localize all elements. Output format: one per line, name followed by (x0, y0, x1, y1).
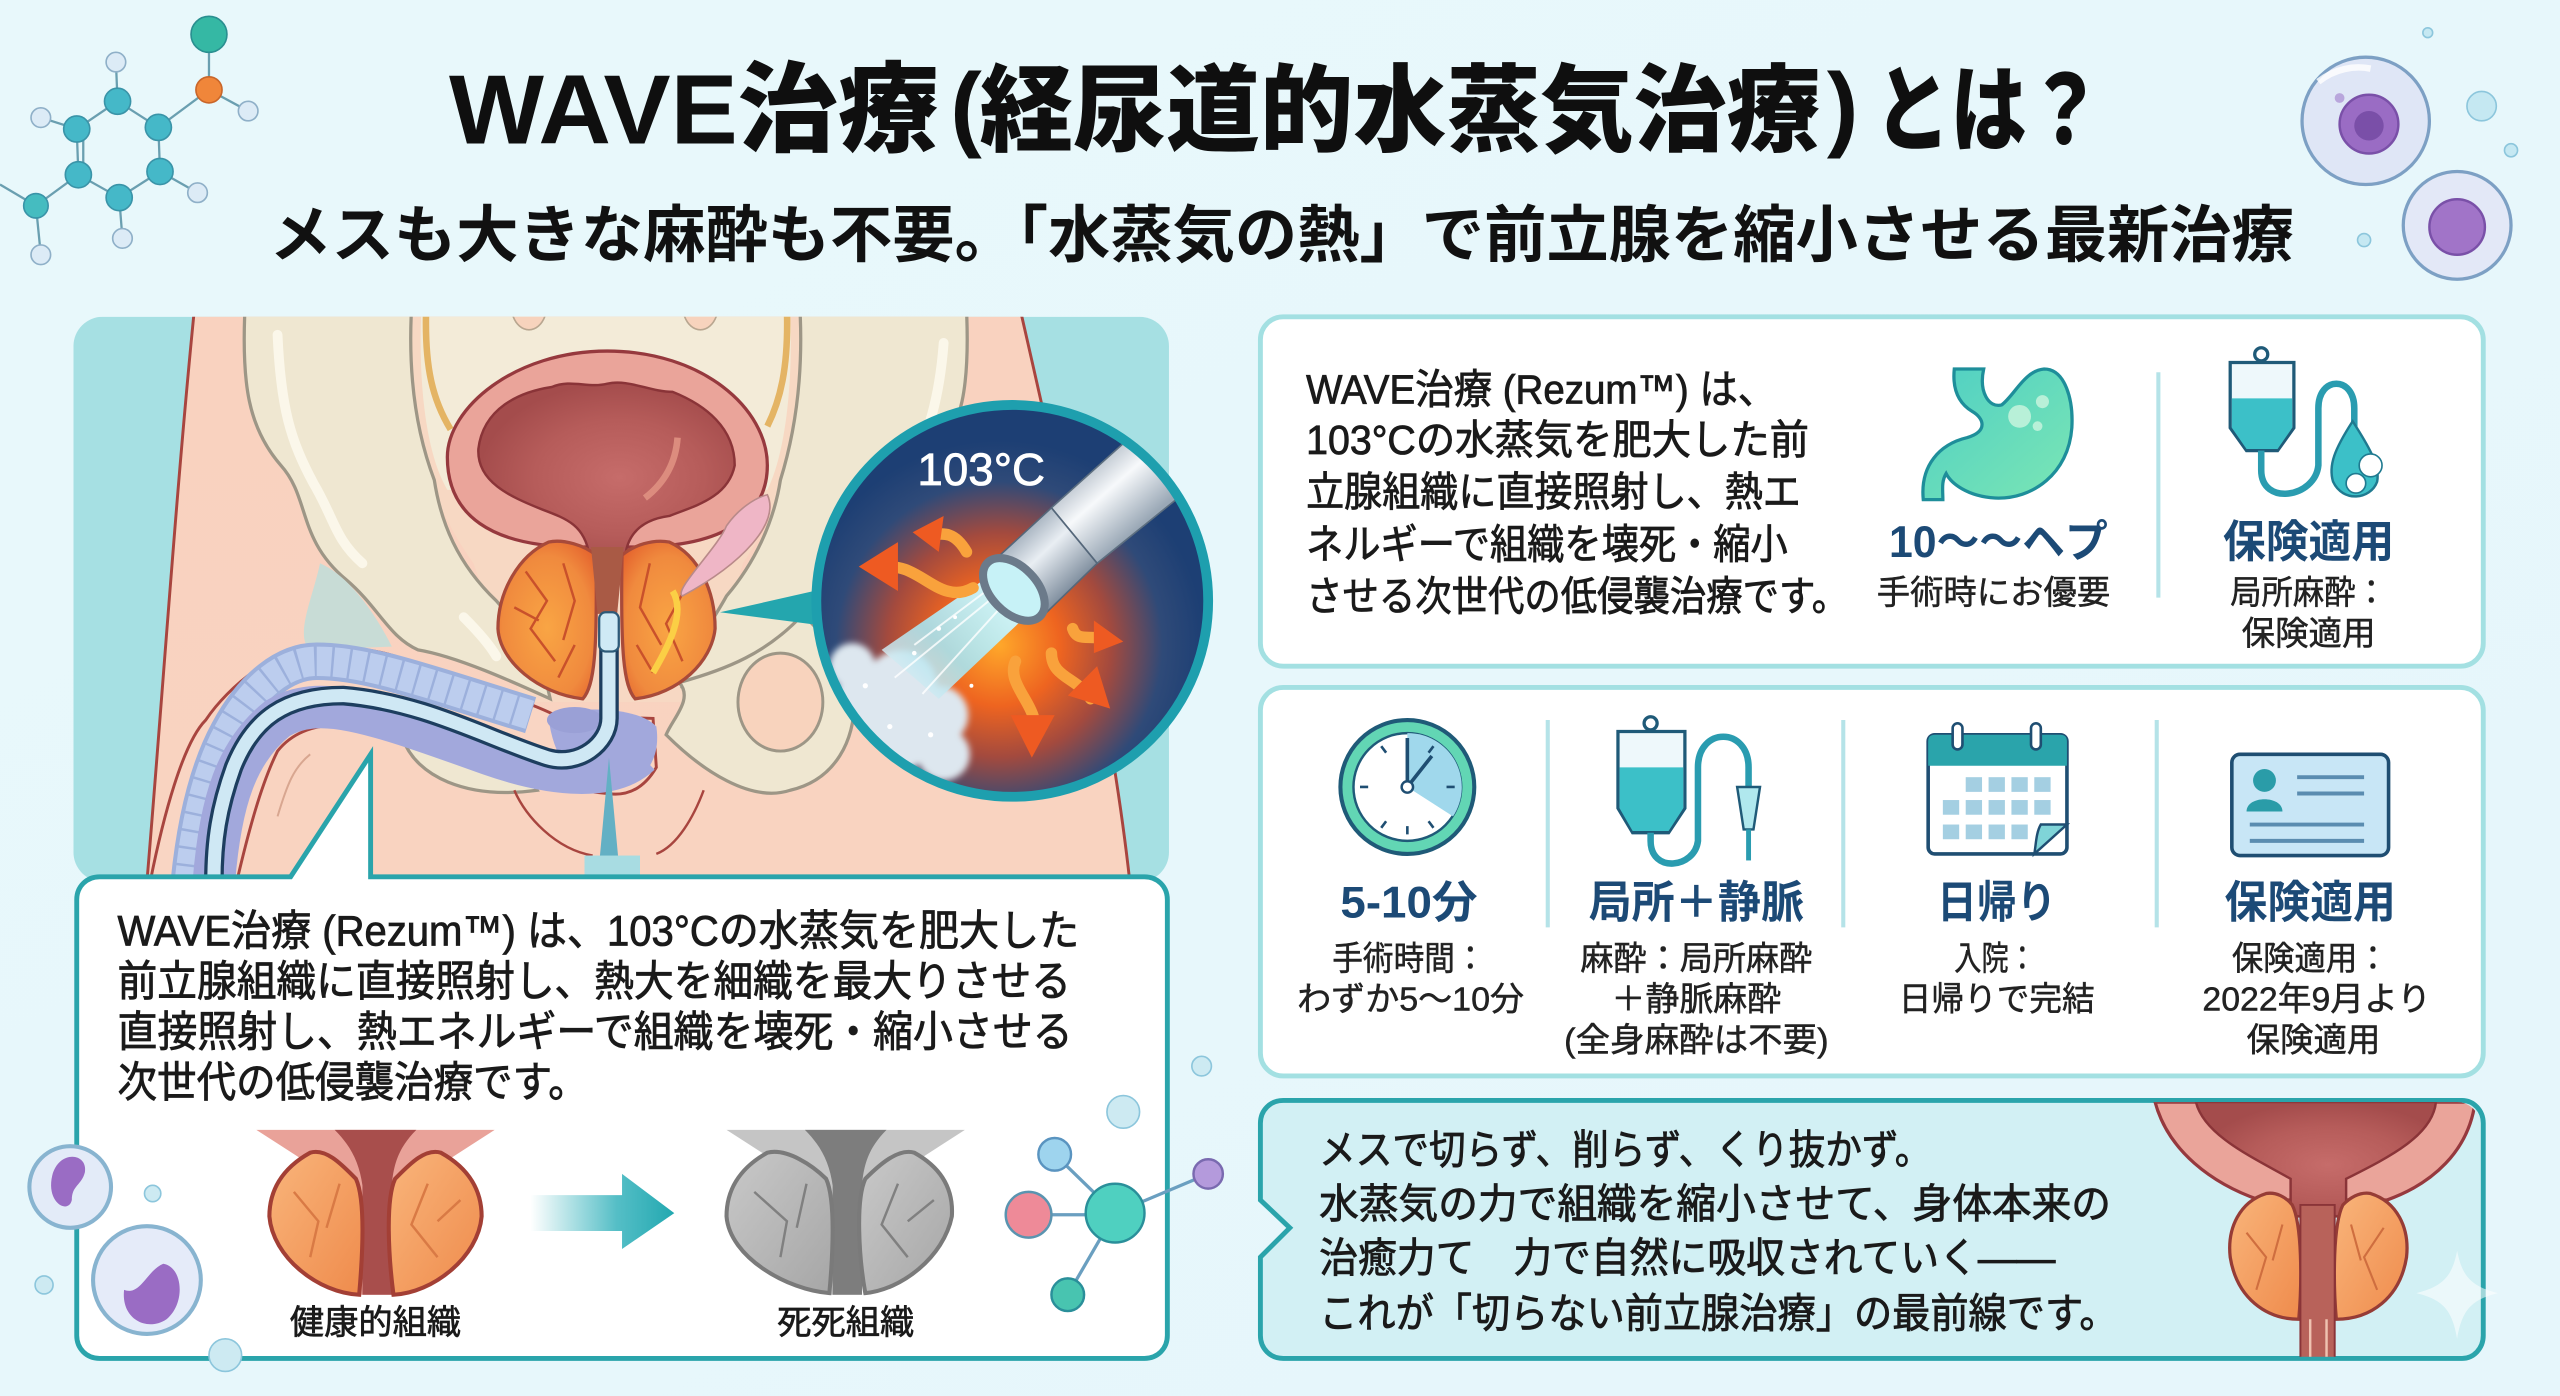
icon: insurance card (2232, 754, 2389, 856)
transition arrow (531, 1174, 674, 1249)
panel: conclusion card (1260, 1100, 2498, 1358)
orange arrows (898, 528, 1094, 716)
sublabel (2230, 575, 2387, 653)
title: ( (950, 54, 982, 160)
callout: description with prostate comparison (77, 754, 1167, 1358)
label: anesthesia: 局所＋静脈 (1589, 879, 1804, 928)
label: day: 日帰り (1937, 879, 2056, 928)
subtitle: メスも大きな麻酔も不要。「水蒸気の熱」で前立腺を縮小させる最新治療 (269, 201, 2294, 270)
magnifier pointer (720, 589, 821, 625)
title: ) (1827, 54, 1858, 160)
overview text (1306, 366, 1848, 620)
panel: anatomy illustration (73, 310, 1169, 882)
small bulb (547, 707, 592, 728)
sacral nodes (513, 315, 717, 330)
label: insurance: 保険適用 (2223, 518, 2394, 567)
icon: clock (1340, 720, 1474, 854)
description text: 前立腺組織に直接照射し、熱大を細織を最大りさせる (118, 958, 1071, 1005)
description text: 直接照射し、熱エネルギーで組織を壊死・縮小させる (118, 1009, 1073, 1056)
pelvic cavity (413, 316, 798, 317)
description text: WAVE治療 (Rezum™) は、103°Cの水蒸気を肥大した (118, 907, 1079, 954)
sublabel (1899, 941, 2095, 1019)
sublabel (1297, 941, 1524, 1019)
spray cone (882, 582, 1018, 698)
instrument shaft (1051, 438, 1182, 563)
sublabel: (全身麻酔は不要) (1564, 1022, 1829, 1059)
sublabel (1564, 941, 1829, 1059)
molecule: bottom right of callout (1006, 1138, 1223, 1311)
spray streaks (894, 592, 998, 694)
seminal vesicle (681, 495, 770, 596)
inner clipped art (829, 438, 1182, 780)
conclusion text (1319, 1127, 2118, 1336)
catheter (214, 620, 609, 882)
penile body (150, 647, 656, 882)
purple urethral band (214, 707, 640, 882)
bladder (447, 351, 767, 547)
bladder lumen (478, 383, 735, 555)
molecule: top left (0, 16, 258, 265)
temperature label: 103°C (917, 444, 1045, 495)
description text (118, 907, 1079, 1106)
instrument ring (989, 508, 1097, 617)
ureters (426, 310, 787, 429)
icon: calendar (1928, 723, 2067, 854)
pelvis bones (244, 310, 967, 793)
magnifier ring (816, 405, 1208, 797)
label: cups: 10～～ヘプ (1889, 518, 2108, 567)
title: 経尿道的水蒸気治療 (980, 59, 1820, 165)
sublabel: 局所麻酔： (2230, 575, 2387, 612)
sublabel (2202, 941, 2431, 1059)
sparkle (2416, 1251, 2498, 1339)
sublabel: 手術時にお優要 (1877, 575, 2110, 612)
sublabel: 保険適用 (2242, 616, 2376, 653)
conclusion text: 治癒力て 力で自然に吸収されていく—— (1319, 1235, 2056, 1281)
panel: key facts card (1260, 687, 2483, 1076)
corpus spongy band (189, 661, 531, 882)
necrotic label: 死死組織 (777, 1304, 914, 1342)
sublabel: 麻酔：局所麻酔 (1580, 941, 1812, 978)
overview text: ネルギーで組織を壊死・縮小 (1306, 521, 1788, 567)
label: insurance: 保険適用 (2224, 879, 2396, 928)
cells: top right (2302, 28, 2518, 279)
description text: 次世代の低侵襲治療です。 (118, 1059, 588, 1106)
corpus segments (189, 661, 531, 882)
teal leader (600, 758, 618, 856)
sublabel: 手術時間： (1332, 941, 1486, 978)
magnified view: 103°C vapor (816, 405, 1208, 797)
hip ring hole (738, 653, 823, 751)
healthy prostate (256, 1130, 495, 1295)
sublabel: わずか5～10分 (1297, 982, 1524, 1019)
sublabel: 保険適用 (2247, 1022, 2380, 1059)
icon: IV drip (1618, 717, 1760, 864)
icon: IV drip with droplet (2230, 348, 2382, 496)
conclusion text: これが「切らない前立腺治療」の最前線です。 (1319, 1290, 2118, 1336)
sublabel: 日帰りで完結 (1899, 982, 2095, 1019)
sublabel: ＋静脈麻酔 (1611, 982, 1781, 1019)
base tab (584, 856, 640, 874)
divider (2157, 372, 2160, 598)
vapor cloud (829, 643, 970, 780)
body skin (147, 310, 1130, 882)
overview text: させる次世代の低侵襲治療です。 (1306, 574, 1848, 620)
bone highlights (278, 335, 944, 656)
sublabel: 2022年9月より (2202, 982, 2431, 1019)
catheter core (207, 652, 616, 874)
necrotic prostate (727, 1130, 965, 1295)
overview text: WAVE治療 (Rezum™) は、 (1306, 366, 1776, 412)
nozzle (971, 547, 1056, 632)
title: とは？ (1874, 59, 2103, 165)
penile bulb (550, 710, 658, 765)
sublabel: 入院： (1954, 941, 2036, 978)
prostate veins (514, 563, 686, 678)
cells: bottom left (29, 1056, 1211, 1371)
label: duration: 5-10分 (1340, 879, 1478, 928)
healthy label: 健康的組織 (290, 1304, 461, 1342)
overview text: 立腺組織に直接照射し、熱エ (1306, 469, 1801, 515)
title (449, 54, 2103, 165)
divider (1548, 720, 2157, 927)
title: WAVE治療 (449, 55, 939, 165)
conclusion text: 水蒸気の力で組織を縮小させて、身体本来の (1319, 1181, 2111, 1227)
icon: stomach (1923, 369, 2072, 500)
scrotum curve (514, 790, 704, 856)
sublabel: 保険適用： (2232, 941, 2389, 978)
panel: overview card (1260, 317, 2483, 666)
vapor dots (863, 615, 973, 737)
conclusion text: メスで切らず、削らず、くり抜かず。 (1319, 1127, 1931, 1173)
leg crease (278, 754, 310, 816)
prostate lobes (498, 541, 596, 699)
upper cavity (421, 310, 791, 490)
overview text: 103°Cの水蒸気を肥大した前 (1306, 417, 1809, 463)
urethra (591, 547, 624, 614)
shaded tissue (304, 563, 392, 650)
catheter tip (599, 612, 619, 651)
lumen highlight (645, 438, 678, 498)
bladder and prostate illustration (2155, 1102, 2475, 1358)
